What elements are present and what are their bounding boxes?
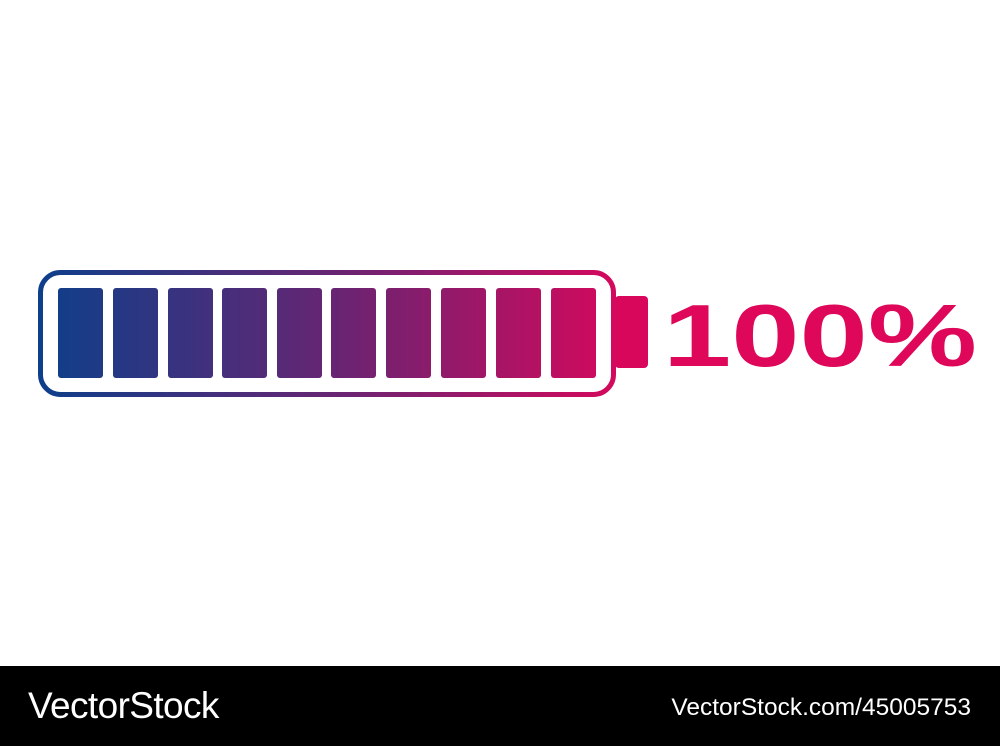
footer bar bbox=[0, 666, 1000, 746]
battery terminal bbox=[615, 296, 648, 368]
charge bars bbox=[58, 288, 596, 378]
battery outline bbox=[40, 272, 614, 394]
footer id: VectorStock.com/45005753 bbox=[671, 694, 971, 721]
footer logo: VectorStock bbox=[28, 685, 219, 726]
percentage label: 100% bbox=[663, 286, 977, 385]
